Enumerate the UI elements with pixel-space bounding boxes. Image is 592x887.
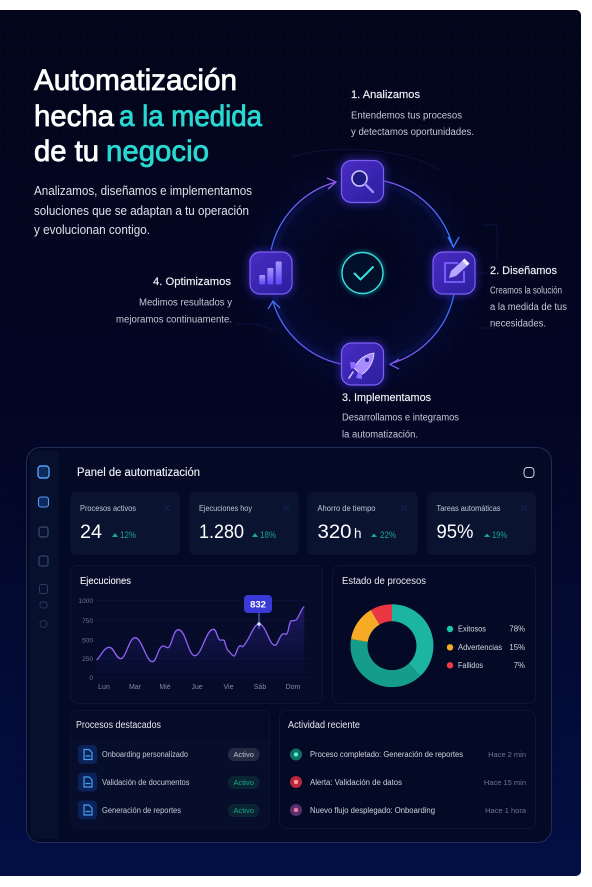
title: a la medida	[119, 100, 262, 133]
line chart: ejecuciones: 750	[82, 618, 93, 625]
step 1 text	[351, 89, 474, 138]
row: generación: Activo	[233, 806, 254, 815]
legend: 78%	[509, 624, 525, 634]
legend	[447, 624, 525, 670]
arc: optimizamos to analizamos	[271, 178, 336, 250]
legend: Fallidos	[458, 661, 483, 670]
stat card: tareas automáticas: Tareas automáticas	[436, 504, 500, 513]
line chart: ejecuciones: Dom	[286, 684, 301, 691]
stat card: ejecuciones hoy	[189, 492, 299, 555]
stat card: procesos activos: Procesos activos	[80, 504, 136, 513]
stat card: tareas automáticas: 95%	[436, 521, 474, 543]
title: hecha	[34, 100, 114, 133]
row: validación: Activo	[233, 778, 254, 787]
step 2 text: 2. Diseñamos	[490, 265, 557, 277]
panel: procesos destacados: Procesos destacados	[76, 720, 161, 731]
line chart: ejecuciones: Mié	[159, 684, 171, 691]
line chart: ejecuciones: Sáb	[254, 684, 266, 691]
panel: actividad reciente: Actividad reciente	[288, 720, 361, 731]
step 4 text: 4. Optimizamos	[153, 276, 231, 288]
row: generación: Generación de reportes	[102, 806, 181, 815]
step 3 text: la automatización.	[342, 430, 418, 440]
arc: implementamos to optimizamos	[268, 301, 341, 364]
sidebar	[30, 451, 59, 839]
cycle diagram	[235, 149, 500, 395]
panel: dashboard	[26, 448, 552, 842]
stat card: ejecuciones hoy: 1.280	[199, 521, 244, 543]
arc glow	[272, 182, 454, 364]
step 2 text: Creamos la solución	[490, 286, 562, 296]
stat card: tareas automáticas	[427, 492, 536, 555]
icon: bar chart	[248, 250, 294, 296]
stat card: procesos activos	[70, 492, 180, 555]
line chart: ejecuciones: 500	[82, 638, 93, 644]
row: proceso completado: Hace 2 min	[488, 750, 526, 759]
row: nuevo flujo	[290, 804, 527, 816]
row: alerta: Alerta: Validación de datos	[310, 778, 402, 787]
panel: procesos destacados	[70, 710, 270, 828]
stat card: procesos activos: 12%	[120, 530, 136, 540]
panel heading: Panel de automatización	[77, 467, 200, 479]
icon: rocket	[339, 341, 386, 387]
stat card: ahorro de tiempo: Ahorro de tiempo	[318, 504, 376, 513]
faint network lines	[235, 149, 500, 330]
row: onboarding	[78, 745, 260, 764]
row: onboarding: Activo	[233, 750, 254, 759]
stat card: ejecuciones hoy: 18%	[260, 530, 276, 540]
line chart: ejecuciones	[70, 566, 322, 704]
row: validación	[78, 772, 260, 792]
arc: analizamos to diseñamos	[384, 181, 459, 247]
icon: magnifier	[339, 158, 386, 205]
line chart: ejecuciones: Jue	[191, 684, 203, 691]
step 4 text	[116, 276, 232, 326]
step 4 text: mejoramos continuamente.	[116, 314, 232, 326]
step 1 text: Entendemos tus procesos	[351, 110, 462, 122]
row: alerta	[290, 776, 526, 788]
step 3 text: 3. Implementamos	[342, 392, 431, 404]
legend: 7%	[514, 661, 525, 670]
step 2 text: necesidades.	[490, 318, 546, 330]
line chart: ejecuciones: Vie	[224, 684, 234, 691]
row: validación: Validación de documentos	[102, 778, 190, 787]
intro paragraph: soluciones que se adaptan a tu operación	[34, 204, 249, 218]
row: onboarding: Onboarding personalizado	[102, 750, 189, 759]
title	[34, 64, 262, 168]
row: nuevo flujo: Nuevo flujo desplegado: Onboarding	[310, 806, 435, 815]
step 2 text	[490, 265, 567, 330]
intro paragraph: Analizamos, diseñamos e implementamos	[34, 184, 252, 198]
intro paragraph	[34, 184, 252, 237]
arc: diseñamos to implementamos	[390, 294, 454, 369]
stat card: ejecuciones hoy: Ejecuciones hoy	[199, 504, 252, 513]
stat card: ahorro de tiempo: h	[354, 526, 362, 541]
icon: panel button	[524, 468, 534, 478]
row: generación	[78, 800, 260, 820]
stat card: ahorro de tiempo: 320	[318, 521, 352, 543]
segment: exitosos	[392, 613, 425, 670]
legend: Advertencias	[458, 643, 502, 652]
stat card: ahorro de tiempo: 22%	[380, 530, 396, 540]
glow halo behind the cycle	[240, 151, 484, 395]
title: Automatización	[34, 64, 237, 97]
tooltip 832	[244, 595, 272, 629]
stat card: tareas automáticas: 19%	[492, 530, 507, 540]
donut chart: estado de procesos: Estado de procesos	[342, 576, 426, 587]
segment: fallidos	[375, 613, 392, 617]
step 1 text: y detectamos oportunidades.	[351, 127, 474, 138]
intro paragraph: y evolucionan contigo.	[34, 223, 150, 237]
legend: 15%	[509, 643, 525, 652]
step 3 text	[342, 392, 459, 440]
row: proceso completado: Proceso completado: Generación de reportes	[310, 750, 463, 759]
segment: advertencias	[359, 617, 375, 640]
stat card: ahorro de tiempo	[307, 492, 418, 555]
line chart: ejecuciones: 0	[89, 675, 93, 682]
icon: pencil	[431, 250, 477, 296]
row: nuevo flujo: Hace 1 hora	[485, 806, 527, 815]
title: negocio	[106, 135, 209, 168]
line chart: ejecuciones: Lun	[98, 684, 110, 691]
step 4 text: Medimos resultados y	[139, 298, 232, 308]
step 1 text: 1. Analizamos	[351, 89, 421, 101]
icon: center check	[342, 252, 383, 294]
legend: Exitosos	[458, 624, 486, 634]
step 2 text: a la medida de tus	[490, 302, 567, 313]
donut chart: estado de procesos	[332, 566, 536, 704]
row: proceso completado	[290, 748, 526, 760]
line chart: ejecuciones: Ejecuciones	[80, 576, 131, 587]
stat card: procesos activos: 24	[80, 521, 102, 543]
line chart: ejecuciones: 1000	[79, 598, 93, 605]
title: de tu	[34, 135, 99, 168]
panel: actividad reciente	[280, 710, 536, 828]
line chart: ejecuciones: 250	[82, 656, 93, 663]
row: alerta: Hace 15 min	[484, 778, 526, 787]
line chart: ejecuciones: Mar	[129, 684, 142, 691]
tooltip 832: 832	[250, 600, 266, 610]
step 3 text: Desarrollamos e integramos	[342, 412, 459, 424]
